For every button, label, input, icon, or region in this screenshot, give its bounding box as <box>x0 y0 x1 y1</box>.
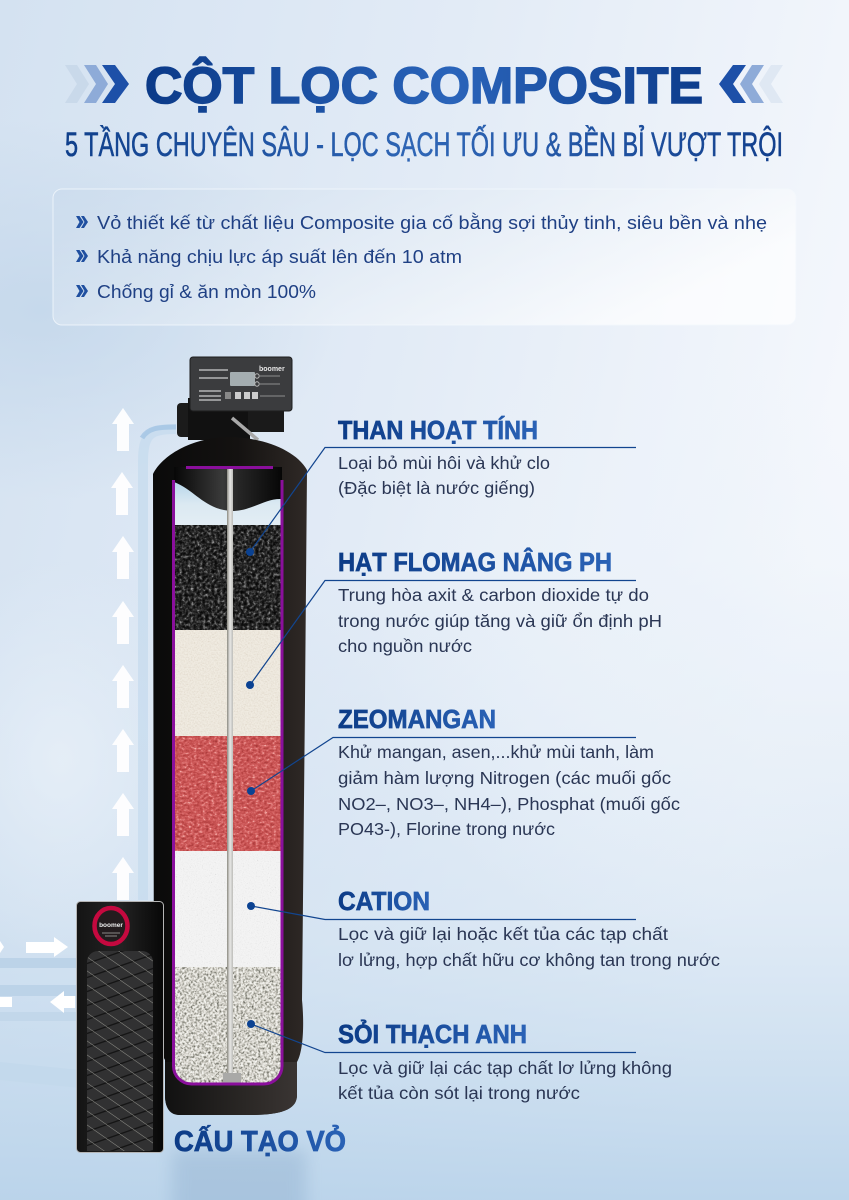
zeomangan layer <box>174 736 282 851</box>
centre tube <box>223 468 241 1084</box>
leader: cation <box>247 902 636 920</box>
label: sỏi thạch anh: kết tủa còn sót lại trong nước <box>338 1083 580 1103</box>
label: than hoạt tính: (Đặc biệt là nước giếng) <box>338 478 535 498</box>
label: cation <box>338 886 720 970</box>
label: zeomangan: PO43-), Florine trong nước <box>338 819 555 839</box>
label: cation: CATION <box>338 886 430 916</box>
control panel box <box>190 357 292 411</box>
control panel box: boomer <box>259 366 285 373</box>
cation layer <box>174 851 282 967</box>
icon: right title chevrons <box>719 65 783 103</box>
label: hạt flomag nâng ph <box>338 547 662 656</box>
panel: key features <box>53 189 796 325</box>
leader: hạt flomag <box>246 580 636 689</box>
brand badge: boomer <box>99 922 123 929</box>
purple cutaway outline <box>174 468 282 1084</box>
label: than hoạt tính: Loại bỏ mùi hôi và khử clo <box>338 453 550 473</box>
feature 1: Vỏ thiết kế từ chất liệu Composite gia cố bằng sợi thủy tinh, siêu bền và nhẹ <box>97 212 767 233</box>
water layer <box>174 482 282 526</box>
label: sỏi thạch anh <box>338 1018 672 1103</box>
dark headspace <box>187 467 282 511</box>
device: composite shell sample <box>76 902 164 1152</box>
label: zeomangan <box>338 704 680 839</box>
leader: sỏi thạch anh <box>247 1020 636 1052</box>
column base <box>165 1062 297 1115</box>
label: than hoạt tính <box>338 415 550 498</box>
label: zeomangan: Khử mangan, asen,...khử mùi tanh, làm <box>338 742 654 762</box>
label: sỏi thạch anh: SỎI THẠCH ANH <box>338 1018 527 1049</box>
label: zeomangan: giảm hàm lượng Nitrogen (các muối gốc <box>338 768 671 788</box>
feature 2: Khả năng chịu lực áp suất lên đến 10 atm <box>97 246 462 267</box>
label: cation: Lọc và giữ lại hoặc kết tủa các tạp chất <box>338 924 668 944</box>
label: hạt flomag nâng ph: cho nguồn nước <box>338 636 472 656</box>
column floor shadow <box>172 1150 306 1200</box>
icon: left title chevrons <box>65 65 129 103</box>
label: hạt flomag nâng ph: Trung hòa axit & carbon dioxide tự do <box>338 585 649 605</box>
label: cấu tạo vỏ: CẤU TẠO VỎ <box>174 1124 346 1158</box>
label: hạt flomag nâng ph: HẠT FLOMAG NÂNG PH <box>338 547 612 577</box>
water pipes behind the column <box>0 427 176 1088</box>
label: sỏi thạch anh: Lọc và giữ lại các tạp chất lơ lửng không <box>338 1058 672 1078</box>
icon: upward flow arrows <box>111 408 134 900</box>
flomag layer <box>174 630 282 736</box>
label: hạt flomag nâng ph: trong nước giúp tăng và giữ ổn định pH <box>338 611 662 631</box>
label: zeomangan: NO2–, NO3–, NH4–), Phosphat (muối gốc <box>338 794 680 814</box>
title: CỘT LỌC COMPOSITE <box>145 56 703 114</box>
brand badge <box>94 908 128 944</box>
label: cation: lơ lửng, hợp chất hữu cơ không tan trong nước <box>338 950 720 970</box>
feature 3: Chống gỉ & ăn mòn 100% <box>97 281 316 302</box>
cutaway interior <box>174 467 282 1085</box>
activated carbon layer <box>174 525 282 630</box>
label: zeomangan: ZEOMANGAN <box>338 704 496 734</box>
gravel layer <box>174 967 282 1085</box>
leader: than hoạt tính <box>246 448 636 556</box>
leader: zeomangan <box>247 738 636 795</box>
icon: horizontal flow arrows <box>0 937 75 1013</box>
textured shell <box>87 951 153 1151</box>
column shell <box>153 437 307 1115</box>
control valve <box>177 398 284 440</box>
filter column <box>153 357 307 1115</box>
label: than hoạt tính: THAN HOẠT TÍNH <box>338 415 538 445</box>
